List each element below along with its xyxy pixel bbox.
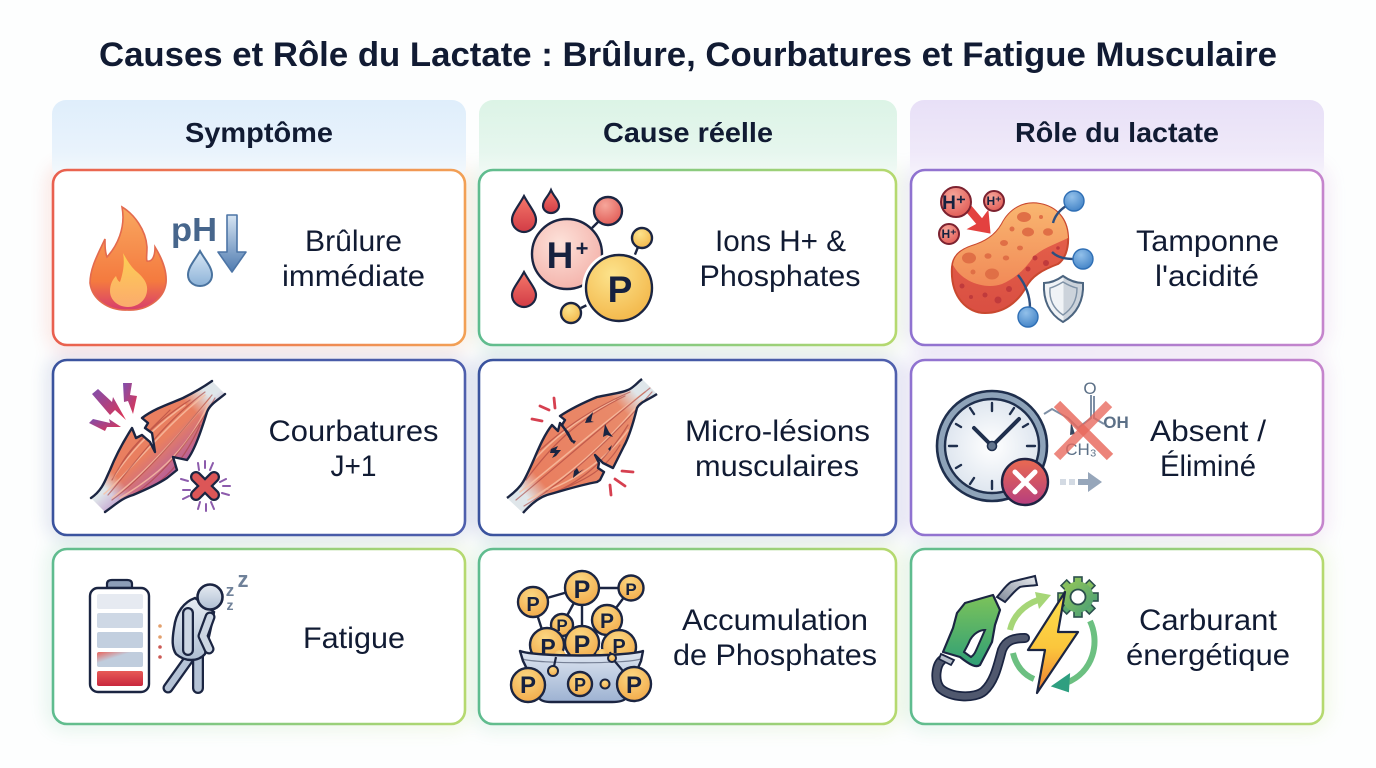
- icon: muscle with micro tears: [506, 378, 658, 514]
- label: [685, 415, 870, 483]
- label: Courbatures: [268, 415, 438, 448]
- icon: clock and crossed-out lactate molecule: O: [1083, 379, 1097, 398]
- icon: low battery and tired person: z: [226, 581, 234, 600]
- icon: bowl of phosphate spheres: P: [540, 634, 556, 660]
- panel: Fatigue: [53, 549, 465, 724]
- icon: sponge buffering acid: H⁺: [942, 193, 966, 214]
- label: immédiate: [282, 260, 425, 293]
- label: Ions H+ &: [715, 225, 846, 258]
- icon: low battery and tired person: z: [238, 567, 248, 592]
- column header: Rôle du lactate: [910, 100, 1324, 180]
- column header: Cause réelle: Cause réelle: [603, 117, 773, 148]
- panel: Absent / Éliminé: [911, 360, 1323, 535]
- icon: sponge buffering acid: H⁺: [942, 227, 956, 241]
- label: Micro-lésions: [685, 415, 870, 448]
- icon: low battery and tired person: [90, 567, 248, 692]
- icon: low battery and tired person: z: [226, 597, 234, 613]
- label: Absent /: [1150, 415, 1267, 448]
- panel: Courbatures J+1: [53, 360, 465, 535]
- icon: flame with pH drop: [90, 207, 246, 310]
- icon: clock and crossed-out lactate molecule: [937, 379, 1129, 505]
- icon: bowl of phosphate spheres: P: [612, 636, 626, 658]
- label: [268, 415, 438, 483]
- icon: bowl of phosphate spheres: P: [556, 616, 568, 635]
- icon: bowl of phosphate spheres: P: [574, 631, 590, 659]
- icon: clock and crossed-out lactate molecule: CH₃: [1065, 440, 1097, 459]
- label: Phosphates: [700, 260, 860, 293]
- label: Tamponne: [1136, 225, 1279, 258]
- panel: Brûlure immédiate: [53, 170, 465, 345]
- icon: sponge buffering acid: H⁺: [986, 194, 1002, 208]
- panel: Accumulation de Phosphates: [479, 549, 896, 724]
- icon: flame with pH drop: pH: [171, 211, 217, 248]
- label: [1126, 604, 1290, 672]
- icon: H+ and phosphate ions: P: [608, 269, 632, 310]
- title: Causes et Rôle du Lactate : Brûlure, Courbatures et Fatigue Musculaire: [99, 36, 1277, 74]
- label: Accumulation: [682, 604, 868, 637]
- label: Fatigue: [303, 622, 405, 655]
- label: J+1: [330, 450, 376, 483]
- label: [673, 604, 877, 672]
- panel: Ions H+ et Phosphates: [479, 170, 896, 345]
- label: [700, 225, 860, 293]
- label: [1136, 225, 1279, 293]
- icon: bowl of phosphate spheres: P: [574, 576, 590, 604]
- icon: bowl of phosphate spheres: P: [625, 580, 637, 599]
- icon: bowl of phosphate spheres: [511, 571, 651, 702]
- panel: Micro-lésions musculaires: [479, 360, 896, 535]
- label: musculaires: [695, 450, 859, 483]
- icon: bowl of phosphate spheres: P: [574, 675, 586, 695]
- label: Carburant: [1139, 604, 1278, 637]
- icon: torn muscle with soreness mark: [85, 375, 230, 520]
- column header: Rôle du lactate: Rôle du lactate: [1015, 117, 1219, 148]
- label: l'acidité: [1155, 260, 1259, 293]
- icon: bowl of phosphate spheres: P: [600, 610, 614, 633]
- icon: bowl of phosphate spheres: P: [626, 672, 642, 699]
- icon: H+ and phosphate ions: [512, 190, 656, 325]
- icon: fuel nozzle, lightning bolt and energy cycle: [936, 576, 1098, 696]
- column header: Symptôme: Symptôme: [185, 117, 333, 148]
- icon: clock and crossed-out lactate molecule: OH: [1103, 413, 1129, 432]
- column header: Symptôme: [52, 100, 466, 180]
- label: de Phosphates: [673, 639, 877, 672]
- icon: H+ and phosphate ions: H: [547, 235, 573, 276]
- label: Brûlure: [305, 225, 402, 258]
- icon: H+ and phosphate ions: +: [576, 236, 588, 261]
- panel: Tamponne l'acidité: [911, 170, 1323, 345]
- label: énergétique: [1126, 639, 1290, 672]
- label: Éliminé: [1160, 450, 1256, 483]
- icon: bowl of phosphate spheres: P: [526, 594, 540, 616]
- label: [282, 225, 425, 293]
- column header: Cause réelle: [479, 100, 897, 180]
- panel: Carburant énergétique: [911, 549, 1323, 724]
- label: [1150, 415, 1267, 483]
- icon: sponge buffering acid: [939, 187, 1093, 327]
- icon: bowl of phosphate spheres: P: [520, 672, 536, 699]
